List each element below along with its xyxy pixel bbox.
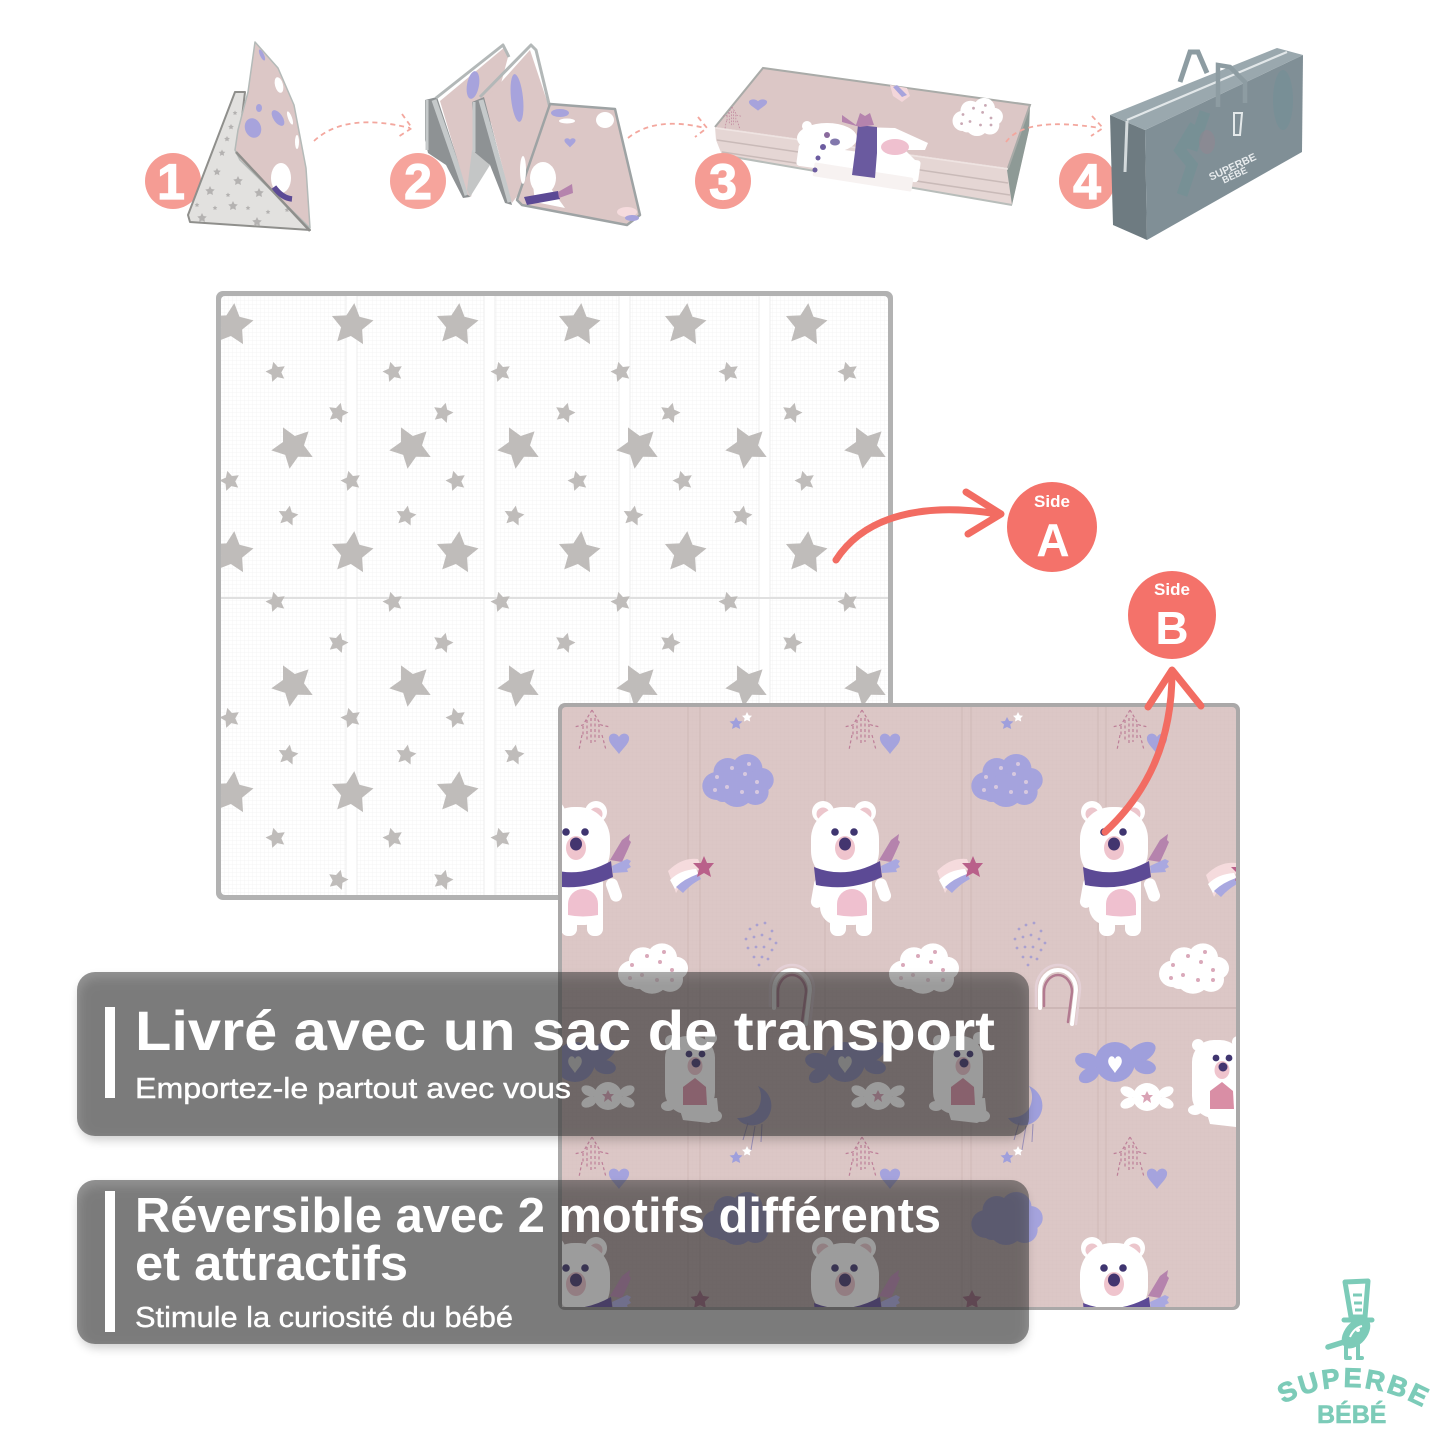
- arrow: step 1 to 2: [314, 114, 412, 141]
- logo: Superbe Bébé: SUPERBE: [1278, 1368, 1430, 1408]
- step 4: carry bag: BÉBÉ: [1221, 165, 1249, 186]
- step 2: mat accordion folded: [425, 45, 640, 225]
- badge: side B: Side: [1154, 580, 1190, 599]
- step 2 number badge: [390, 153, 446, 210]
- badge: side B: [1128, 571, 1216, 659]
- step 1: mat half folded: [188, 42, 310, 231]
- mat side B: pink bears: [558, 703, 1240, 1310]
- badge: side B: B: [1155, 602, 1189, 654]
- badge: side A: A: [1036, 514, 1070, 566]
- badge: side A: [1007, 482, 1097, 572]
- mat side A: grey stars: [209, 290, 893, 902]
- callout: carry bag: Emportez-le partout avec vous: [135, 1073, 571, 1105]
- step 3 number badge: [695, 153, 751, 210]
- step 2 number badge: 2: [404, 154, 432, 210]
- callout: carry bag: Livré avec un sac de transport: [135, 999, 995, 1062]
- step 4 number badge: 4: [1073, 154, 1101, 210]
- step 4 number badge: [1059, 153, 1115, 210]
- arrow: to side A: [836, 492, 1001, 560]
- arrow: step 2 to 3: [628, 117, 707, 138]
- step 1 number badge: 1: [157, 154, 185, 210]
- logo: Superbe Bébé: BÉBÉ: [1317, 1400, 1386, 1429]
- step 1 number badge: [145, 153, 201, 210]
- callout: reversible: Réversible avec 2 motifs différents: [135, 1189, 941, 1243]
- badge: side A: Side: [1034, 492, 1070, 511]
- callout: reversible: et attractifs: [135, 1237, 408, 1291]
- logo: Superbe Bébé: [1278, 1278, 1430, 1429]
- callout: carry bag: [74, 972, 1031, 1144]
- step 3 number badge: 3: [709, 154, 737, 210]
- step 3: mat folded stack: [715, 68, 1030, 205]
- arrow: step 3 to 4: [1006, 116, 1103, 142]
- step 4: carry bag: [1110, 48, 1303, 240]
- callout: reversible: [77, 1180, 1029, 1372]
- arrow: to side B: [1105, 670, 1201, 832]
- callout: reversible: Stimule la curiosité du bébé: [135, 1302, 513, 1334]
- step 4: carry bag: SUPERBE: [1207, 151, 1258, 183]
